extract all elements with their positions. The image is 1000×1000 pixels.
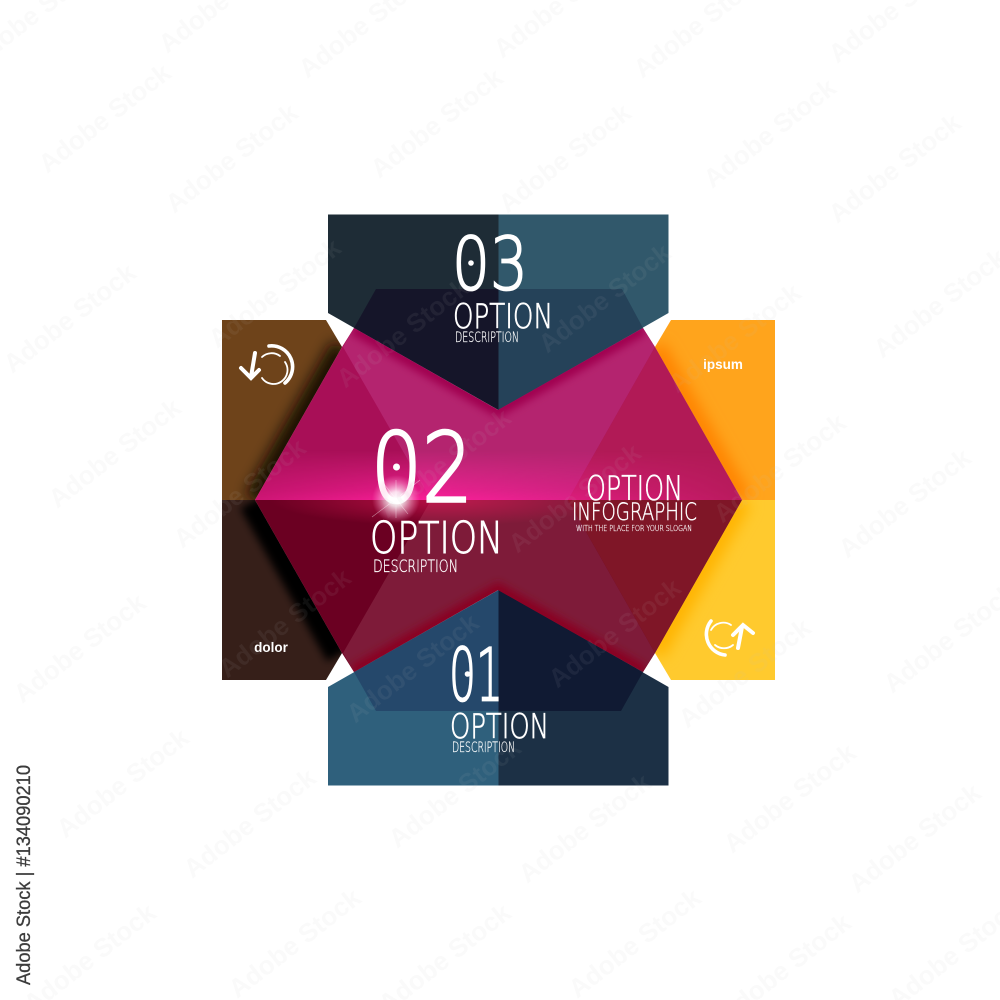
watermark pattern: Adobe Stock: [33, 57, 177, 179]
text: description bottom: DESCRIPTION: [452, 740, 515, 756]
heading: option infographic: OPTION: [586, 469, 683, 509]
heading: option middle: OPTION: [370, 513, 503, 564]
watermark pattern: Adobe Stock: [673, 612, 817, 734]
watermark pattern: Adobe Stock: [0, 257, 142, 379]
watermark pattern: Adobe Stock: [43, 392, 187, 514]
panel: top option 03: [328, 214, 668, 410]
watermark pattern: Adobe Stock: [533, 237, 677, 359]
watermark pattern: Adobe Stock: [503, 437, 647, 559]
panel: dark brown bottom-left: [222, 500, 347, 680]
panel: brown top-left: [222, 320, 347, 500]
watermark pattern: Adobe Stock: [51, 722, 195, 844]
icon: zero dot in 02: [393, 464, 400, 470]
heading: option top: OPTION: [453, 297, 553, 337]
number 01: 01: [449, 634, 503, 718]
icon: zero dot in 03: [468, 260, 474, 266]
watermark pattern: Adobe Stock: [341, 607, 485, 729]
text: description middle: DESCRIPTION: [373, 557, 458, 577]
watermark pattern: Adobe Stock: [168, 432, 312, 554]
panel: magenta upper half of centre bow: [250, 325, 750, 500]
stock id label: Adobe Stock | #134090210: [14, 765, 35, 985]
watermark pattern: Adobe Stock: [718, 737, 862, 859]
watermark pattern: Adobe Stock: [513, 767, 657, 889]
icon: clockwise arrow: [706, 621, 753, 655]
text: slogan: WITH THE PLACE FOR YOUR SLOGAN: [576, 524, 692, 533]
watermark pattern: Adobe Stock: [365, 62, 509, 184]
watermark pattern: Adobe Stock: [823, 107, 967, 229]
watermark pattern: Adobe Stock: [708, 407, 852, 529]
icon: counter-clockwise arrow: [241, 346, 293, 384]
watermark pattern: Adobe Stock: [178, 762, 322, 884]
watermark pattern: Adobe Stock: [203, 232, 347, 354]
watermark pattern: Adobe Stock: [8, 587, 152, 709]
panel: orange top-right: [650, 320, 775, 500]
panel: yellow bottom-right: [650, 500, 775, 680]
watermark pattern: Adobe Stock: [698, 72, 842, 194]
watermark pattern: Adobe Stock: [383, 732, 527, 854]
heading: infographic: INFOGRAPHIC: [572, 498, 697, 526]
icon: sparkle flare: [372, 475, 420, 523]
watermark pattern: Adobe Stock: [160, 97, 304, 219]
number 02: 02: [371, 412, 473, 524]
number 03: 03: [452, 222, 528, 308]
watermark pattern: Adobe Stock: [833, 442, 977, 564]
watermark pattern: Adobe Stock: [843, 777, 987, 899]
watermark pattern: Adobe Stock: [663, 277, 807, 399]
watermark pattern: Adobe Stock: [543, 572, 687, 694]
label: ipsum: ipsum: [703, 357, 743, 372]
panel: bottom option 01: [328, 590, 668, 786]
watermark pattern: Adobe Stock: [373, 402, 517, 524]
watermark pattern: Adobe Stock: [213, 562, 357, 684]
heading: option bottom: OPTION: [450, 707, 549, 747]
watermark pattern: Adobe Stock: [493, 97, 637, 219]
text: description top: DESCRIPTION: [455, 330, 519, 346]
panel: crimson lower half of centre bow: [255, 500, 742, 672]
watermark pattern: Adobe Stock: [331, 272, 475, 394]
label: dolor: dolor: [254, 640, 289, 655]
icon: zero dot in 01: [465, 671, 470, 677]
